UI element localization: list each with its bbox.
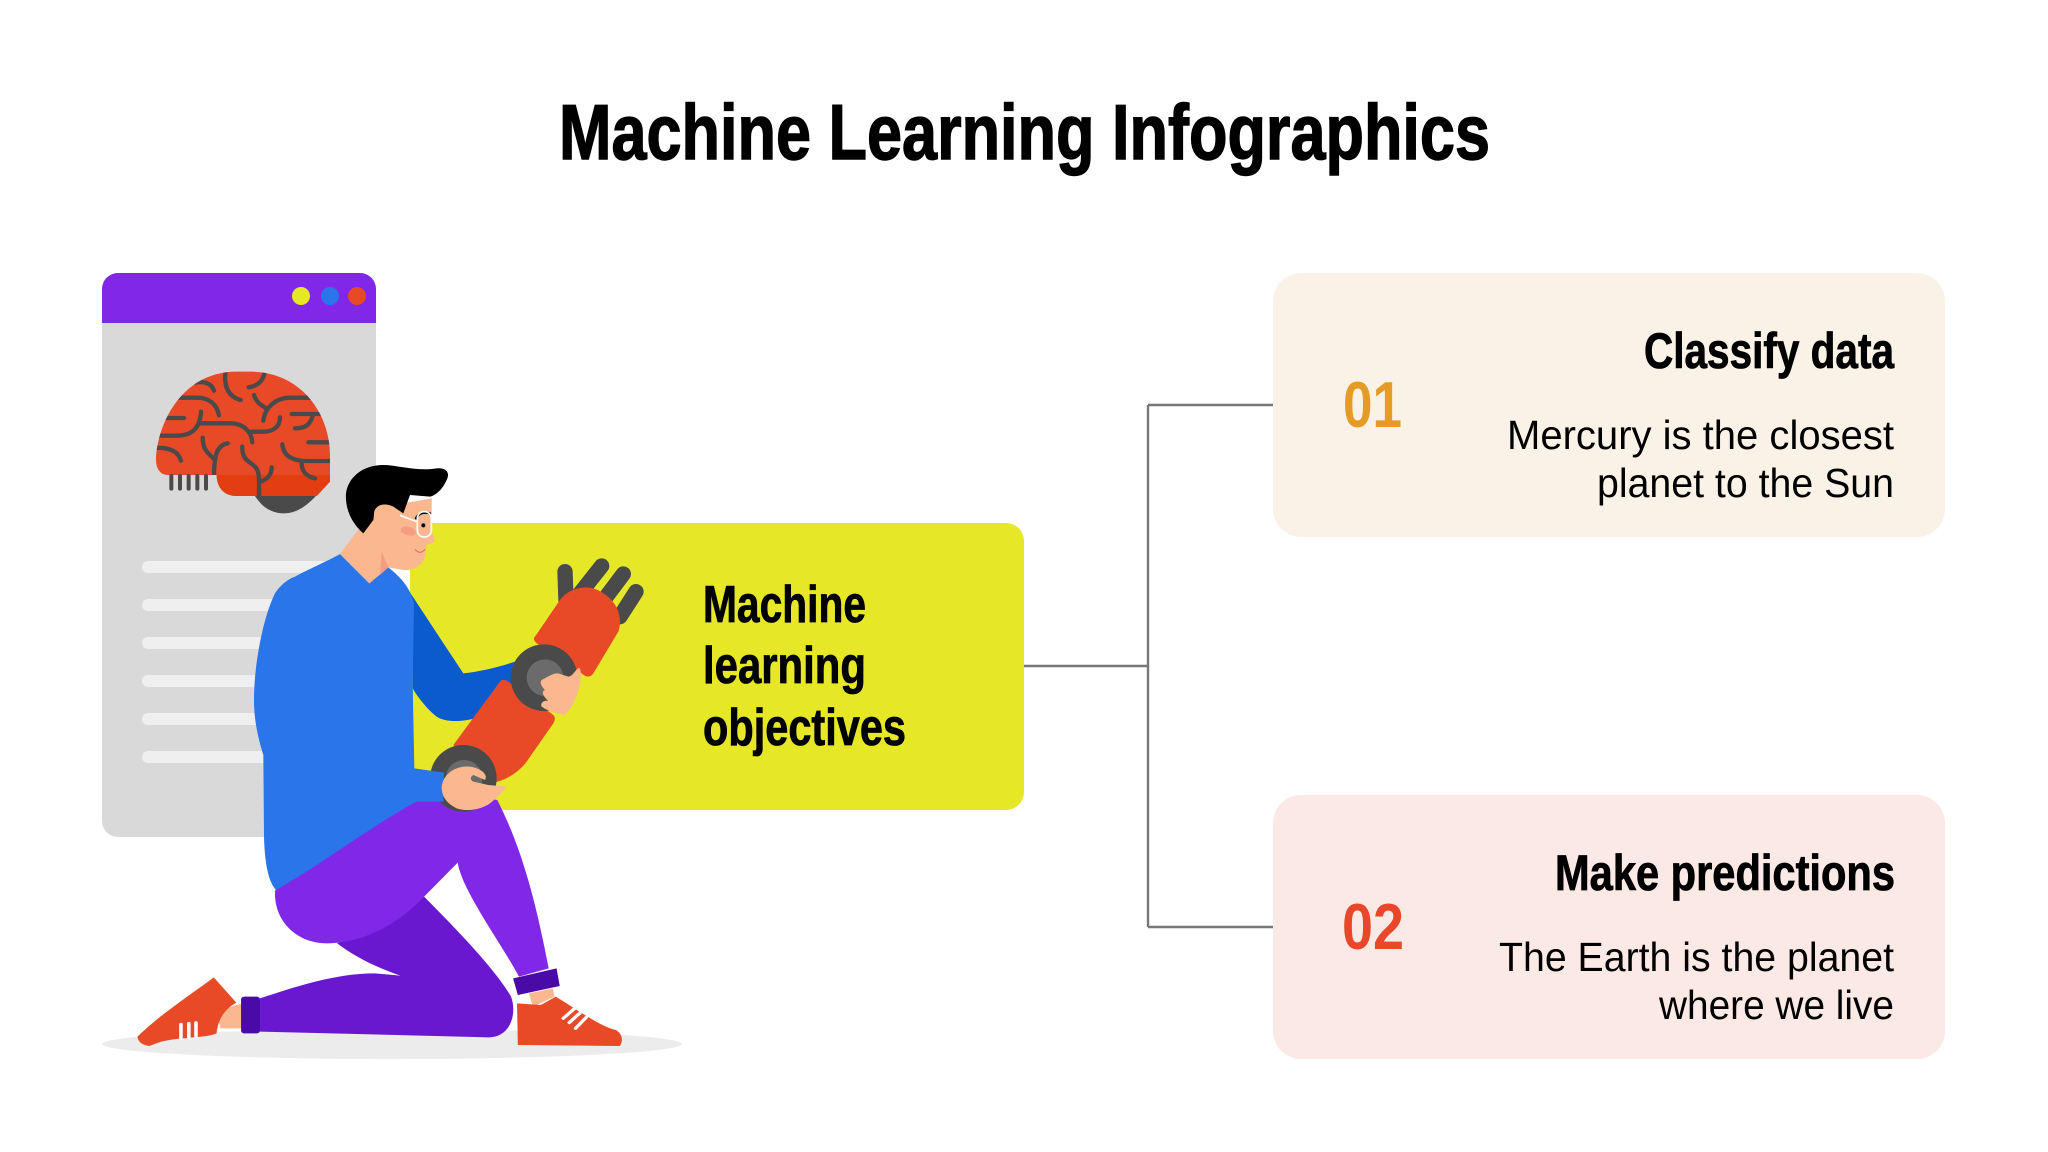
number 01: 01 [1343, 368, 1402, 441]
robot arm upper [453, 566, 636, 783]
lower hand [442, 766, 507, 810]
heading: classify data: Classify data [1644, 323, 1895, 379]
back arm [408, 590, 517, 721]
body text: Mercury is the closest [1507, 412, 1895, 458]
body text: where we live [1658, 982, 1894, 1028]
heading: machine learning objectives [703, 576, 906, 757]
panel: objectives box [410, 523, 1024, 810]
eye and glasses [400, 512, 431, 537]
heading: machine learning objectives: Machine [703, 576, 866, 634]
ground shadow [102, 1029, 682, 1059]
sweater [254, 554, 444, 890]
legs [137, 790, 622, 1046]
heading: make predictions: Make predictions [1555, 845, 1895, 901]
face and neck [340, 498, 435, 583]
body text: planet to the Sun [1597, 460, 1894, 506]
smile [415, 549, 425, 552]
title: Machine Learning Infographics [559, 88, 1490, 176]
connector lines [1024, 405, 1273, 927]
body text [1499, 934, 1895, 1028]
panel: browser window [102, 273, 376, 837]
panel: card 02 [1273, 795, 1945, 1059]
ear [374, 505, 403, 528]
panel: card 01 [1273, 273, 1945, 537]
heading: machine learning objectives: learning [703, 637, 866, 695]
heading: machine learning objectives: objectives [703, 699, 906, 757]
hair [346, 465, 448, 533]
illustration: person with robot arm [137, 465, 636, 1046]
icon: brain [153, 370, 333, 513]
cheek [400, 525, 417, 537]
upper hand [541, 668, 581, 715]
lower robot joint [430, 745, 497, 812]
body text: The Earth is the planet [1499, 934, 1895, 980]
shoe: front [517, 997, 622, 1046]
shoe: back [137, 977, 236, 1046]
torso and head [254, 465, 581, 890]
body text [1507, 412, 1895, 506]
number 02: 02 [1342, 890, 1404, 963]
